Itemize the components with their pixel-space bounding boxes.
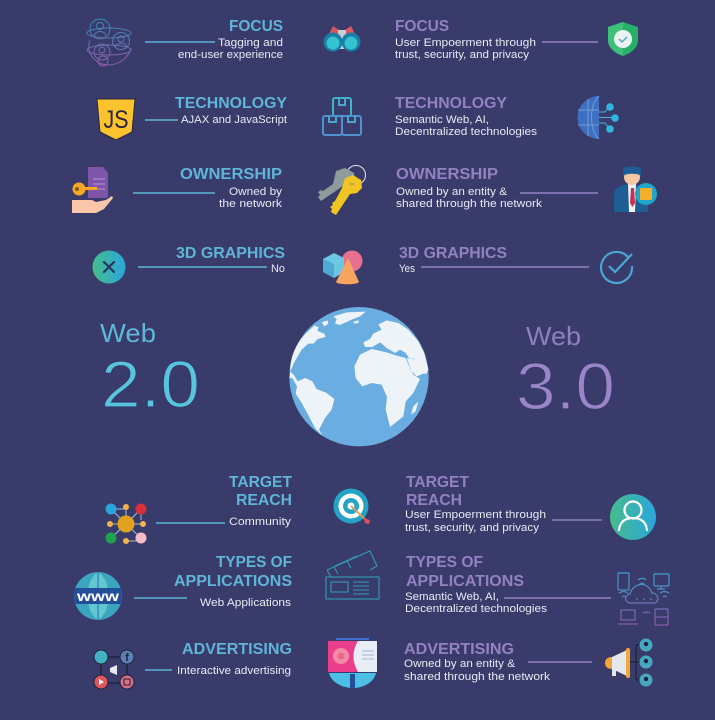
row: ownership Web 2.0: [72, 166, 283, 213]
icon: community network: [106, 504, 146, 544]
connector: [133, 192, 215, 194]
description: Decentralized technologies: [405, 603, 548, 615]
description: User Empoerment through: [395, 37, 536, 49]
connector: [542, 41, 598, 43]
center: globe: [289, 307, 429, 446]
connector: [520, 192, 598, 194]
description: AJAX and JavaScript: [181, 114, 287, 126]
heading: OWNERSHIP: [396, 166, 498, 183]
row: types of applications Web 3.0: [326, 551, 669, 625]
description: Semantic Web, AI,: [395, 114, 489, 126]
description: Interactive advertising: [177, 665, 291, 677]
heading: ADVERTISING: [404, 641, 514, 658]
heading: TARGET: [406, 474, 469, 491]
icon: cross circle: [92, 250, 126, 284]
heading: TECHNOLOGY: [175, 95, 287, 112]
icon: half globe with nodes: [578, 96, 619, 139]
description: Tagging and: [218, 37, 283, 49]
row: 3D graphics Web 3.0: [323, 245, 632, 284]
description: [178, 37, 283, 61]
description: end-user experience: [178, 49, 283, 61]
center: Web 3.0 title: [516, 321, 615, 423]
description: shared through the network: [404, 671, 551, 683]
row: 3D graphics Web 2.0: [92, 245, 285, 284]
description: [404, 658, 551, 683]
icon: www globe: [74, 572, 122, 620]
description: Owned by: [229, 186, 283, 198]
row: focus Web 3.0: [324, 18, 638, 61]
heading: TARGET: [229, 474, 292, 491]
row: target reach Web 2.0: [106, 474, 292, 544]
connector: [421, 266, 589, 268]
heading: [229, 474, 292, 509]
icon: billboard: [328, 638, 377, 688]
label: 3.0: 3.0: [516, 349, 615, 423]
heading: APPLICATIONS: [174, 573, 292, 590]
description: No: [271, 263, 285, 275]
heading: FOCUS: [395, 18, 449, 35]
row: technology Web 3.0: [323, 95, 619, 139]
heading: APPLICATIONS: [406, 573, 524, 590]
heading: TYPES OF: [216, 554, 292, 571]
description: Owned by an entity &: [396, 186, 508, 198]
icon: tickets: [326, 551, 379, 599]
description: the network: [219, 198, 283, 210]
connector: [504, 597, 611, 599]
icon: www globe: www: [76, 588, 119, 604]
connector: [134, 597, 187, 599]
icon: stacked boxes: [323, 98, 361, 135]
icon: megaphone with audience: [605, 638, 652, 686]
icon: 3D shapes: [323, 250, 362, 284]
description: [405, 591, 548, 615]
center: Web 2.0 title: [100, 318, 200, 421]
description: Decentralized technologies: [395, 126, 538, 138]
connector: [145, 119, 178, 121]
label: 2.0: 2.0: [101, 347, 200, 421]
description: [396, 186, 543, 210]
description: Community: [229, 516, 292, 528]
heading: [406, 554, 524, 590]
row: ownership Web 3.0: [318, 166, 657, 215]
icon: check circle: [601, 252, 632, 283]
description: Owned by an entity &: [404, 658, 516, 670]
heading: [174, 554, 292, 590]
heading: FOCUS: [229, 18, 283, 35]
heading: OWNERSHIP: [180, 166, 282, 183]
connector: [156, 522, 225, 524]
icon: user network: [87, 19, 131, 66]
label: Web: Web: [526, 321, 581, 351]
connector: [138, 266, 267, 268]
row: focus Web 2.0: [87, 18, 283, 66]
description: Yes: [399, 263, 415, 275]
connector: [552, 519, 602, 521]
description: Web Applications: [200, 597, 292, 609]
heading: TYPES OF: [406, 554, 483, 571]
icon: cloud devices: [618, 573, 669, 625]
description: [405, 509, 546, 534]
description: shared through the network: [396, 198, 543, 210]
description: User Empoerment through: [405, 509, 546, 521]
heading: ADVERTISING: [182, 641, 292, 658]
heading: REACH: [406, 492, 462, 509]
heading: TECHNOLOGY: [395, 95, 507, 112]
heading: 3D GRAPHICS: [176, 245, 285, 262]
heading: 3D GRAPHICS: [399, 245, 507, 262]
icon: businessman with package: [614, 166, 657, 212]
row: types of applications Web 2.0: [74, 554, 292, 620]
connector: [145, 669, 172, 671]
description: trust, security, and privacy: [395, 49, 530, 61]
icon: JavaScript badge: [97, 99, 135, 140]
connector: [145, 41, 215, 43]
icon: JavaScript badge: JS: [104, 106, 128, 134]
description: Semantic Web, AI,: [405, 591, 499, 603]
description: [219, 186, 283, 210]
row: target reach Web 3.0: [334, 474, 656, 540]
icon: target with dart: [334, 488, 370, 524]
icon: hand with key and document: [72, 167, 113, 213]
description: trust, security, and privacy: [405, 522, 540, 534]
connector: [528, 661, 592, 663]
icon: social media network: [94, 650, 134, 689]
icon: keys: [318, 166, 366, 215]
icon: social media network: f: [125, 652, 129, 664]
row: advertising Web 3.0: [328, 638, 652, 688]
description: [395, 37, 536, 61]
label: Web: Web: [100, 318, 156, 348]
description: [395, 114, 538, 138]
icon: user circle: [610, 494, 656, 540]
icon: binoculars: [324, 26, 360, 52]
row: advertising Web 2.0: [94, 641, 292, 689]
row: technology Web 2.0: [97, 95, 287, 140]
heading: [406, 474, 469, 509]
icon: shield: [608, 22, 638, 56]
heading: REACH: [236, 492, 292, 509]
